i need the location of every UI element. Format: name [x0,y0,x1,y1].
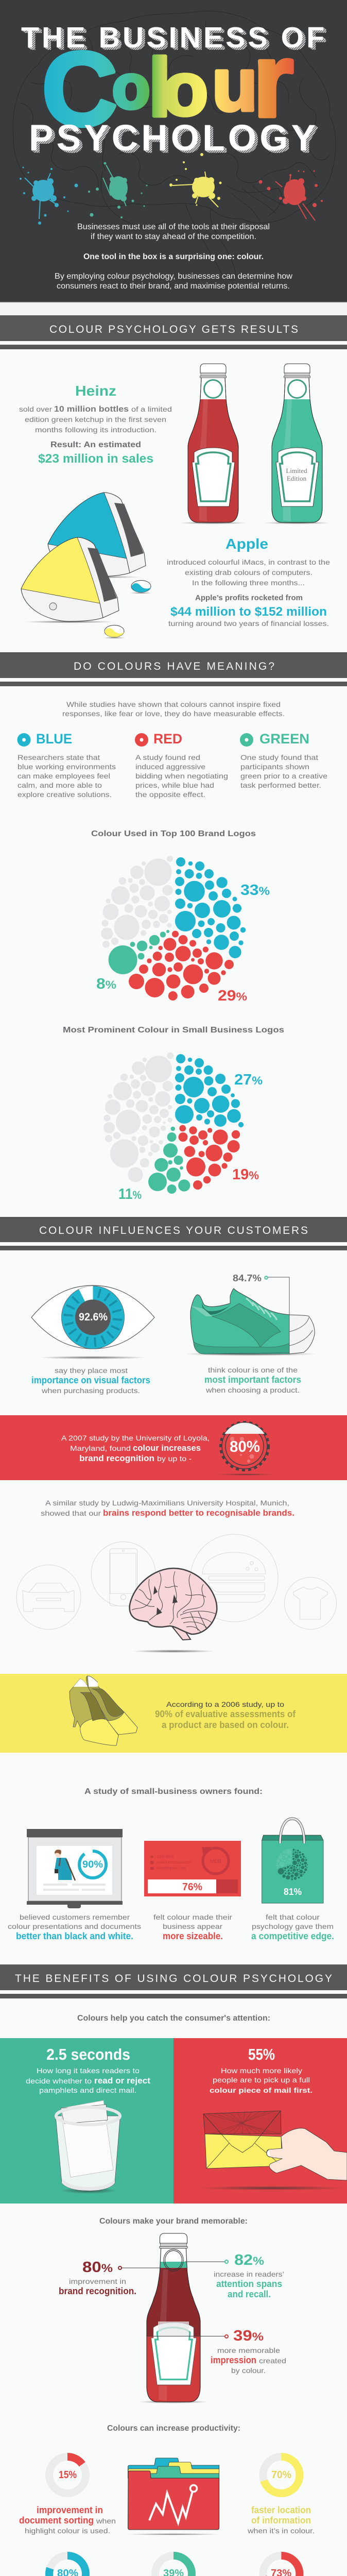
similar study text: A similar study by Ludwig-Maximilians University Hospital, Munich, [45,1499,289,1507]
panel: 2.5 seconds: How long it takes readers to [37,2066,140,2075]
column: green: participants shown [240,762,309,771]
caption: black and white [8,1913,141,1941]
Heinz text: months following its introduction. [35,426,157,434]
Heinz text: 10 million bottles [54,405,129,414]
donut: 70% [263,2456,300,2494]
donut: 15% [49,2456,85,2494]
column: red: A study found red [135,753,200,761]
section heading: do colours have meaning [0,652,347,686]
gap strip [0,303,347,315]
section heading: benefits [0,1964,347,1998]
panel: evaluative assessments: According to a 2006 study, up to [166,1700,284,1708]
heading: productivity: Colours can increase productivity: [107,2424,240,2433]
callout: 39% impression: created [259,2357,286,2365]
icon: business card: 1234-5678 [157,1855,173,1859]
trainer caption: think colour is one of the [208,1366,298,1374]
callout: 39% impression: impression [211,2355,256,2365]
column: green: task performed better. [240,781,321,789]
person figure [55,1850,75,1880]
hero intro text: consumers react to their brand, and maximise potential returns. [57,282,290,291]
title lines: PSYCHOLOGY [29,118,316,159]
similar study text: showed that our [41,1509,101,1517]
panel: evaluative assessments [0,1674,347,1753]
donut: 15%: 15% [59,2469,77,2481]
column: red: RED [153,731,182,747]
ketchup bottle with callout levels [118,2233,228,2403]
panel: 55%: 55% [248,2045,275,2063]
caption: document sorting [19,2505,116,2535]
Apple text: $44 million to $152 million [170,605,327,619]
icon: burger in circle [190,1534,278,1622]
icon: business card: www.loremipsum.com [157,1861,192,1865]
column: blue [18,731,116,799]
paint splat: blue [20,167,78,225]
title word: Colour: u [212,43,257,126]
eye caption: when purchasing products. [41,1386,140,1395]
donut: 70%: 70% [271,2469,291,2481]
caption: sizeable: more sizeable. [163,1931,223,1941]
iMac: blue [48,493,152,594]
column: green [240,731,327,789]
paint splat: yellow [169,153,221,207]
eye caption [31,1366,150,1395]
column: red: induced aggressive [135,762,205,771]
bubble chart: top 100 brand logos: 8% [96,976,116,992]
column: red: bidding when negotiating [135,772,228,780]
Apple text: In the following three months... [192,579,305,587]
icon: business card: MDB [210,1859,221,1865]
panel: evaluative assessments: a product are based on colour. [162,1720,289,1730]
Heinz text: of a limited [131,405,172,413]
column: red: prices, while blue had [135,781,214,789]
panel: brand recognition [0,1415,347,1480]
chart title: top 100 brand logos: Colour Used in Top 100 Brand Logos [91,829,256,838]
icon: t-shirt in circle [284,1578,337,1629]
section heading: colour psychology gets results: COLOUR PSYCHOLOGY GETS RESULTS [49,324,298,335]
ketchup bottle: red [179,364,247,524]
column: green: GREEN [259,731,309,747]
callout: 82% attention [214,2252,284,2299]
callout: 80% brand recognition: brand recognition. [59,2286,136,2296]
callout: 82% attention: increase in readers’ [214,2270,284,2278]
panel: 2.5 seconds: read or reject [94,2076,150,2086]
hero intro text [55,223,292,291]
trainer caption: most important factors [204,1375,301,1385]
Heinz text: Result: An estimated [50,440,141,449]
section heading: colour psychology gets results [0,315,347,349]
icon: glass bin with paper [56,2100,120,2194]
section heading: colour influences your customers: COLOUR INFLUENCES YOUR CUSTOMERS [39,1225,308,1236]
bubble chart: small business logos: 11% [118,1186,142,1202]
donut: 39% search time [115,2555,232,2576]
bubble chart: small business logos: 27% [234,1072,263,1088]
title lines: THE BUSINESS OF [21,21,324,54]
callout: 39% impression: more memorable [217,2346,280,2354]
title shadows [22,22,327,161]
panel: 55% [173,2038,347,2204]
bubble chart: top 100 brand logos: 29% [218,988,247,1004]
caption: black and white: colour presentations and documents [8,1922,141,1930]
column: green: green prior to a creative [240,772,327,780]
trainer caption [204,1366,301,1394]
Apple text: Apple [225,536,268,552]
callout: 39% impression [211,2328,286,2375]
icon: high heels [70,1676,137,1745]
callout: 80% brand recognition: improvement in [69,2277,126,2285]
caption: sizeable [153,1913,232,1941]
title lines [21,21,324,159]
section heading: colour influences your customers [0,1217,347,1250]
callout: 82% attention: attention spans [216,2279,282,2289]
callout: 39% impression: by colour. [231,2366,266,2375]
donut: 80% motivation [44,2555,91,2576]
Apple text: introduced colourful iMacs, in contrast to the [167,558,330,566]
hero intro text: Businesses must use all of the tools at their disposal [77,223,270,231]
callout: 82% attention: and recall. [228,2289,271,2299]
section heading: do colours have meaning: DO COLOURS HAVE MEANING? [74,660,274,672]
icon: shopping bag [262,1819,323,1903]
chart title: small business logos: Most Prominent Colour in Small Business Logos [63,1026,284,1035]
panel: 55%: colour piece of mail first. [210,2086,313,2094]
bubble chart: small business logos: 19% [232,1166,259,1183]
column: green: One study found that [240,753,318,761]
caption: faster location: when it’s in colour. [247,2527,315,2535]
column: blue: calm, and more able to [18,781,102,789]
callout: 82% attention: 82% [234,2252,264,2268]
icon: business card [144,1841,241,1896]
hero intro text: By employing colour psychology, businesses can determine how [55,272,292,281]
icon: trainer with 84.7% colour [183,1273,317,1356]
panel: evaluative assessments: 90% of evaluative assessments of [155,1709,296,1719]
similar study text: brains respond better to recognisable brands. [103,1508,294,1518]
ring: 90% [79,1851,106,1878]
iMac: yellow [21,537,126,639]
panel: 2.5 seconds [0,2038,173,2204]
Apple text: turning around two years of financial losses. [168,619,329,628]
panel: 2.5 seconds: 2.5 seconds [46,2045,130,2063]
paint splat: red [258,170,323,221]
brain line drawing [13,11,336,280]
column: blue: BLUE [36,731,72,747]
paint splat: green [88,162,147,218]
meaning intro: responses, like fear or love, they do have measurable effects. [62,709,285,718]
icon: trainer with 84.7% colour: 84.7% [233,1273,262,1283]
Apple text: existing drab colours of computers. [185,568,313,577]
heading: study of small business owners: A study of small-business owners found: [84,1787,263,1796]
trainer caption: when choosing a product. [205,1386,300,1394]
Heinz text [19,383,172,466]
hero intro text: One tool in the box is a surprising one: colour. [83,252,264,261]
ring: 90%: 90% [82,1859,103,1870]
icon: shopping bag: 81% [284,1887,302,1897]
caption: competitive edge [251,1913,334,1941]
panel: 2.5 seconds: decide whether to [26,2077,92,2085]
panel: brand recognition: colour increases [133,1443,201,1453]
Heinz text: edition green ketchup in the first seven [25,415,166,423]
panel: brand recognition: by up to - [157,1454,192,1463]
Apple text [167,536,330,628]
caption: document sorting: highlight colour is used. [25,2527,110,2535]
icon: bottle cap 80% [217,1422,274,1476]
panel: brand recognition: A 2007 study by the University of Loyola, [61,1434,210,1442]
icon: bottle cap 80%: 80% [230,1437,260,1455]
caption: document sorting: when [96,2517,116,2525]
hero panel [0,0,347,303]
icon: car in circle [16,1565,81,1629]
eye caption: importance on visual factors [31,1375,150,1385]
bubble chart: top 100 brand logos [96,856,270,1004]
panel: 55%: people are to pick up a full [213,2076,310,2084]
title word: Colour: o [112,53,150,122]
icon: phone in circle [91,1541,155,1606]
caption: competitive edge: felt that colour [266,1913,320,1921]
caption: faster location [247,2505,315,2535]
ketchup bottle: green limited edition: Limited [286,467,307,474]
Heinz text: sold over [19,405,52,413]
caption: sizeable: business appear [163,1922,222,1930]
panel: brand recognition: brand recognition [79,1453,154,1463]
column: red: the opposite effect. [135,790,205,799]
panel: 2.5 seconds: pamphlets and direct mail. [39,2086,136,2094]
column: red [135,731,228,799]
heading: catch attention: Colours help you catch the consumer's attention: [77,2014,270,2023]
hero intro text: if they want to stay ahead of the competition. [91,232,256,241]
Heinz text: $23 million in sales [38,452,153,466]
bubble chart: top 100 brand logos: 33% [240,882,270,899]
panel: brand recognition: Maryland, found [70,1444,131,1452]
caption: black and white: believed customers remember [20,1913,130,1921]
caption: competitive edge: psychology gave them [252,1922,334,1930]
title word: Colour: o [162,47,208,131]
callout: 80% brand recognition [59,2259,136,2296]
column: blue: Researchers state that [18,753,100,761]
caption: document sorting: document sorting [19,2515,94,2526]
ketchup bottle: green limited edition: Edition [287,474,307,482]
meaning intro [62,700,285,718]
title word: Colour: l [148,41,171,133]
Heinz text: Heinz [75,383,116,399]
icon: business card: 76% [182,1882,202,1893]
eye caption: say they place most [55,1366,128,1375]
icon: brain [130,1568,217,1653]
caption: black and white: better than black and white. [16,1931,133,1941]
donut: 73% comprehension [248,2555,315,2576]
Apple text: Apple’s profits rocketed from [195,594,303,602]
column: blue: explore creative solutions. [18,790,112,799]
icon: eye: 92.6% [79,1311,108,1323]
title word: Colour: r [253,22,293,139]
caption: sizeable: felt colour made their [153,1913,232,1921]
ketchup bottle: green limited edition [263,364,331,524]
caption: faster location: faster location [251,2505,311,2515]
icon: eye [31,1285,154,1359]
heading: memorable: Colours make your brand memorable: [99,2217,248,2226]
icon: business card: lorem@ipsum.com [157,1867,186,1870]
similar study text [41,1499,294,1518]
callout: 80% brand recognition: 80% [82,2259,113,2276]
title word: Colour: C [42,30,117,148]
meaning intro: While studies have shown that colours cannot inspire fixed [66,700,281,708]
icon: projector screen [27,1829,123,1908]
icon: hand holding envelope [199,2111,347,2190]
column: blue: can make employees feel [18,772,110,780]
caption: faster location: of information [251,2515,311,2526]
caption: competitive edge: a competitive edge. [251,1931,334,1941]
caption: document sorting: improvement in [37,2505,103,2515]
panel: 55%: How much more likely [221,2066,302,2075]
folder icon [126,2458,221,2535]
bubble chart: small business logos [103,1052,263,1202]
column: blue: blue working environments [18,762,116,771]
mini bubble mark on bag [276,1849,308,1880]
section heading: benefits: THE BENEFITS OF USING COLOUR PSYCHOLOGY [15,1973,332,1985]
callout: 39% impression: 39% [233,2328,264,2344]
